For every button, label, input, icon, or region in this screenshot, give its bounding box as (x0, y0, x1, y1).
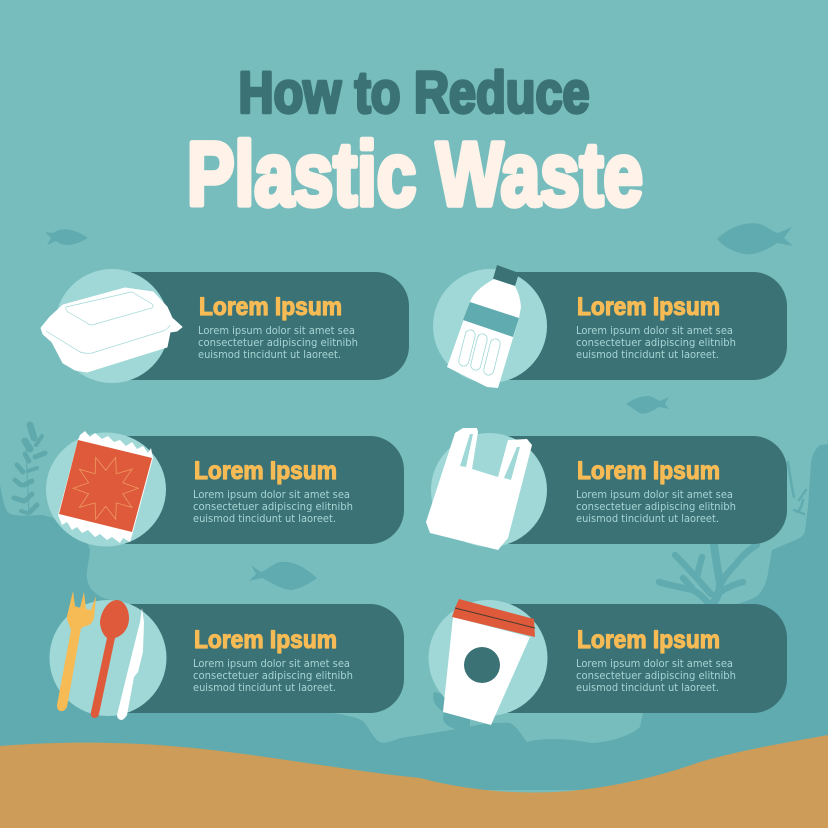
icon: bag (426, 428, 532, 550)
icon: fork (57, 591, 96, 711)
card (125, 604, 404, 713)
card (500, 272, 787, 380)
icon: spoon (91, 600, 129, 718)
card (500, 604, 787, 713)
heading: Lorem Ipsum (199, 293, 342, 321)
fish: middle (626, 396, 669, 414)
card (125, 436, 404, 544)
body text: consectetuer adipiscing elitnibh (198, 337, 358, 349)
body text (193, 489, 353, 525)
coral (659, 462, 806, 604)
title line one: How to Reduce (238, 60, 590, 126)
body text: euismod tincidunt ut laoreet. (576, 349, 719, 361)
panel: snack wrapper (46, 431, 404, 546)
icon backing circle (431, 433, 547, 547)
icon backing circle (50, 600, 166, 716)
body text: Lorem ipsum dolor sit amet sea (193, 658, 350, 670)
body text: euismod tincidunt ut laoreet. (198, 349, 341, 361)
body text: Lorem ipsum dolor sit amet sea (576, 489, 733, 501)
body text: consectetuer adipiscing elitnibh (576, 337, 736, 349)
body text: consectetuer adipiscing elitnibh (576, 501, 736, 513)
panel: takeaway cup (428, 599, 787, 725)
background: dark seabed rocks (0, 444, 828, 790)
icon: knife (117, 608, 144, 720)
icon: snack wrapper (58, 431, 153, 543)
body text: Lorem ipsum dolor sit amet sea (576, 658, 733, 670)
background: mound beside cup (433, 692, 470, 731)
title line two: Plastic Waste (187, 125, 643, 225)
sand (0, 735, 828, 828)
heading: Lorem Ipsum (577, 457, 720, 485)
heading: Lorem Ipsum (194, 626, 337, 654)
fish: bottom (249, 562, 317, 590)
body text: euismod tincidunt ut laoreet. (576, 682, 719, 694)
icon backing circle (46, 432, 166, 546)
body text: Lorem ipsum dolor sit amet sea (576, 325, 733, 337)
body text: consectetuer adipiscing elitnibh (193, 501, 353, 513)
fish: top right (717, 223, 793, 254)
body text: Lorem ipsum dolor sit amet sea (198, 325, 355, 337)
heading: Lorem Ipsum (577, 626, 720, 654)
card (500, 436, 787, 544)
body text: euismod tincidunt ut laoreet. (193, 513, 336, 525)
body text: consectetuer adipiscing elitnibh (193, 670, 353, 682)
body text: euismod tincidunt ut laoreet. (576, 513, 719, 525)
heading: Lorem Ipsum (194, 457, 337, 485)
body text: euismod tincidunt ut laoreet. (193, 682, 336, 694)
body text (576, 325, 736, 361)
panel: plastic bag (426, 428, 787, 550)
title (187, 60, 643, 225)
panel: cutlery (50, 591, 404, 720)
body text (576, 658, 736, 694)
icon backing circle (428, 600, 548, 716)
panel: plastic bottle (433, 265, 787, 388)
seaweed plant (14, 425, 45, 515)
icon: cup (443, 599, 535, 725)
body text (193, 658, 353, 694)
icon: foam food box (41, 288, 182, 372)
fish: top left (45, 229, 88, 245)
panel: food box (41, 269, 409, 383)
heading: Lorem Ipsum (577, 293, 720, 321)
body text: Lorem ipsum dolor sit amet sea (193, 489, 350, 501)
body text: consectetuer adipiscing elitnibh (576, 670, 736, 682)
body text (198, 325, 358, 361)
icon: bottle (447, 265, 521, 388)
card (125, 272, 409, 380)
icon backing circle (55, 269, 169, 383)
icon backing circle (433, 269, 547, 383)
body text (576, 489, 736, 525)
